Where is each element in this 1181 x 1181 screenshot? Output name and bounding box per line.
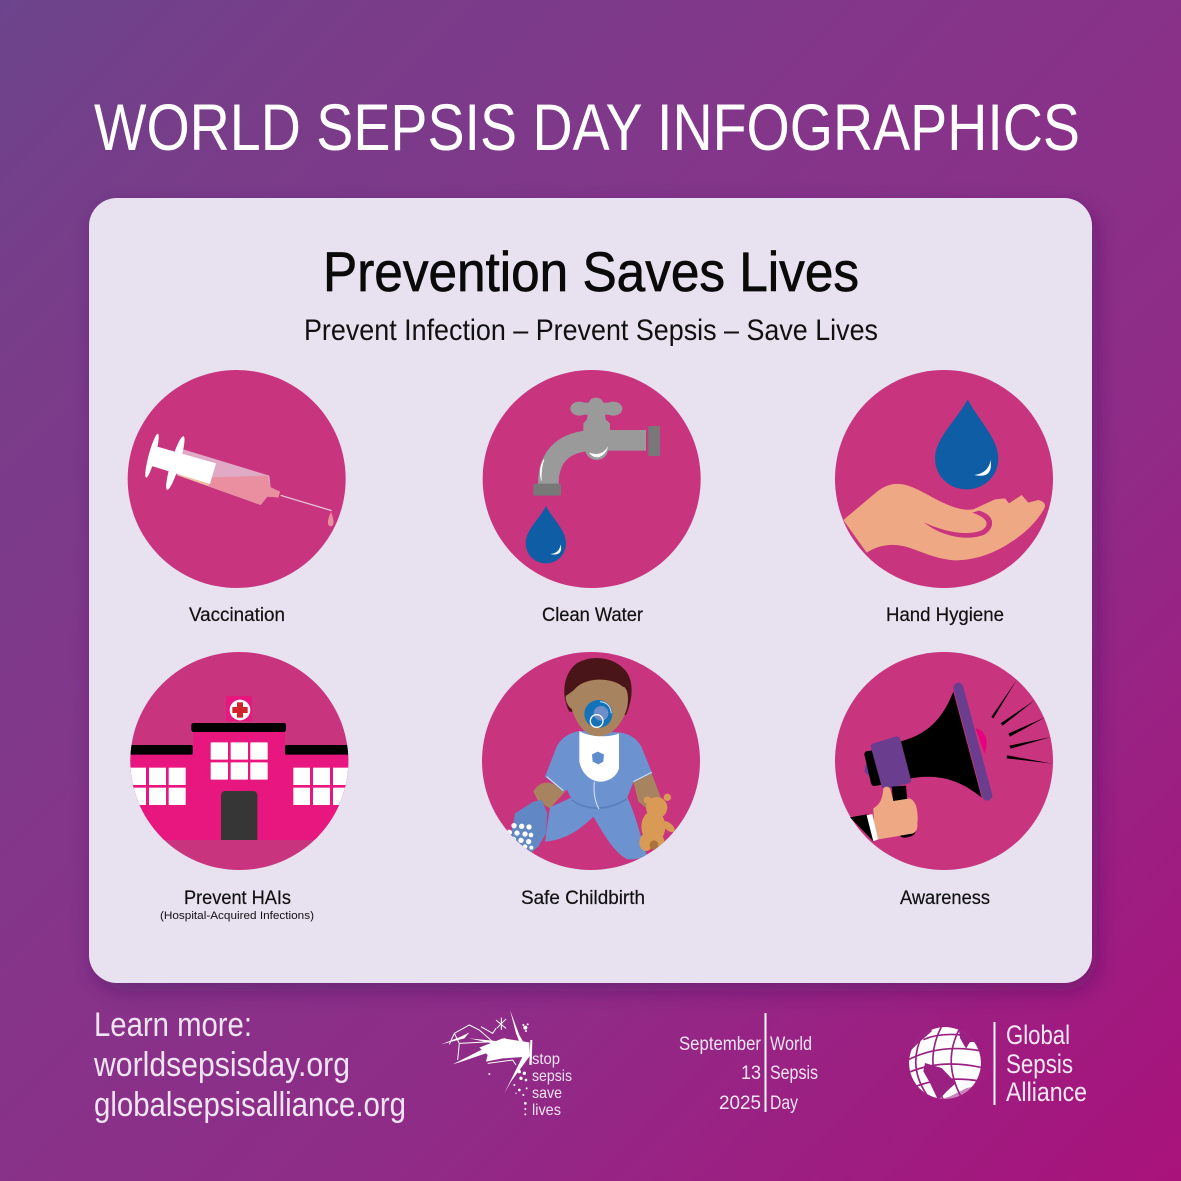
- label: hand hygiene: Hand Hygiene: [886, 605, 1004, 626]
- logo: world sepsis day date: 13: [741, 1063, 761, 1084]
- label: clean water: Clean Water: [542, 605, 644, 626]
- label: prevent HAIs: [160, 888, 314, 922]
- logo: global sepsis alliance: Sepsis: [1006, 1049, 1073, 1079]
- logo: world sepsis day date: Sepsis: [770, 1063, 818, 1084]
- panel: prevention: [89, 198, 1092, 983]
- icon: vaccination syringe: [128, 370, 346, 588]
- logo: stop sepsis save lives: lives: [532, 1102, 561, 1119]
- footer: learn more links: worldsepsisday.org: [93, 1046, 350, 1084]
- logo: global sepsis alliance: Alliance: [1006, 1077, 1087, 1107]
- logo: global sepsis alliance: Global: [1006, 1020, 1070, 1050]
- icon: clean water tap: [483, 370, 701, 588]
- label: prevent HAIs: Prevent HAIs: [184, 888, 291, 909]
- logo: world sepsis day date: World: [770, 1034, 812, 1055]
- logo: world sepsis day date: September: [679, 1034, 762, 1055]
- icon: megaphone: [835, 652, 1053, 870]
- logo: world sepsis day date: 2025: [719, 1093, 761, 1114]
- icon: hand hygiene: [835, 370, 1053, 588]
- subheading: Prevent Infection – Prevent Sepsis – Save Lives: [304, 314, 878, 347]
- label: vaccination: Vaccination: [189, 605, 285, 626]
- logo: world sepsis day date: [679, 1013, 818, 1114]
- icon: baby: [482, 652, 700, 870]
- icon: hospital: [127, 652, 353, 870]
- footer: learn more links: Learn more:: [94, 1006, 252, 1044]
- footer: learn more links: globalsepsisalliance.org: [94, 1086, 406, 1124]
- label: awareness: Awareness: [900, 888, 990, 909]
- logo: stop sepsis save lives: [441, 1010, 572, 1119]
- heading: Prevention Saves Lives: [323, 240, 859, 303]
- logo: world sepsis day date: Day: [770, 1093, 798, 1114]
- label: prevent HAIs: (Hospital-Acquired Infections): [160, 910, 314, 922]
- logo: stop sepsis save lives: stop: [532, 1051, 560, 1068]
- label: safe childbirth: Safe Childbirth: [521, 888, 645, 909]
- logo: global sepsis alliance: [907, 1020, 1087, 1107]
- logo: stop sepsis save lives: sepsis: [532, 1068, 572, 1085]
- logo: stop sepsis save lives: save: [532, 1085, 562, 1102]
- footer: learn more links: [93, 1006, 406, 1124]
